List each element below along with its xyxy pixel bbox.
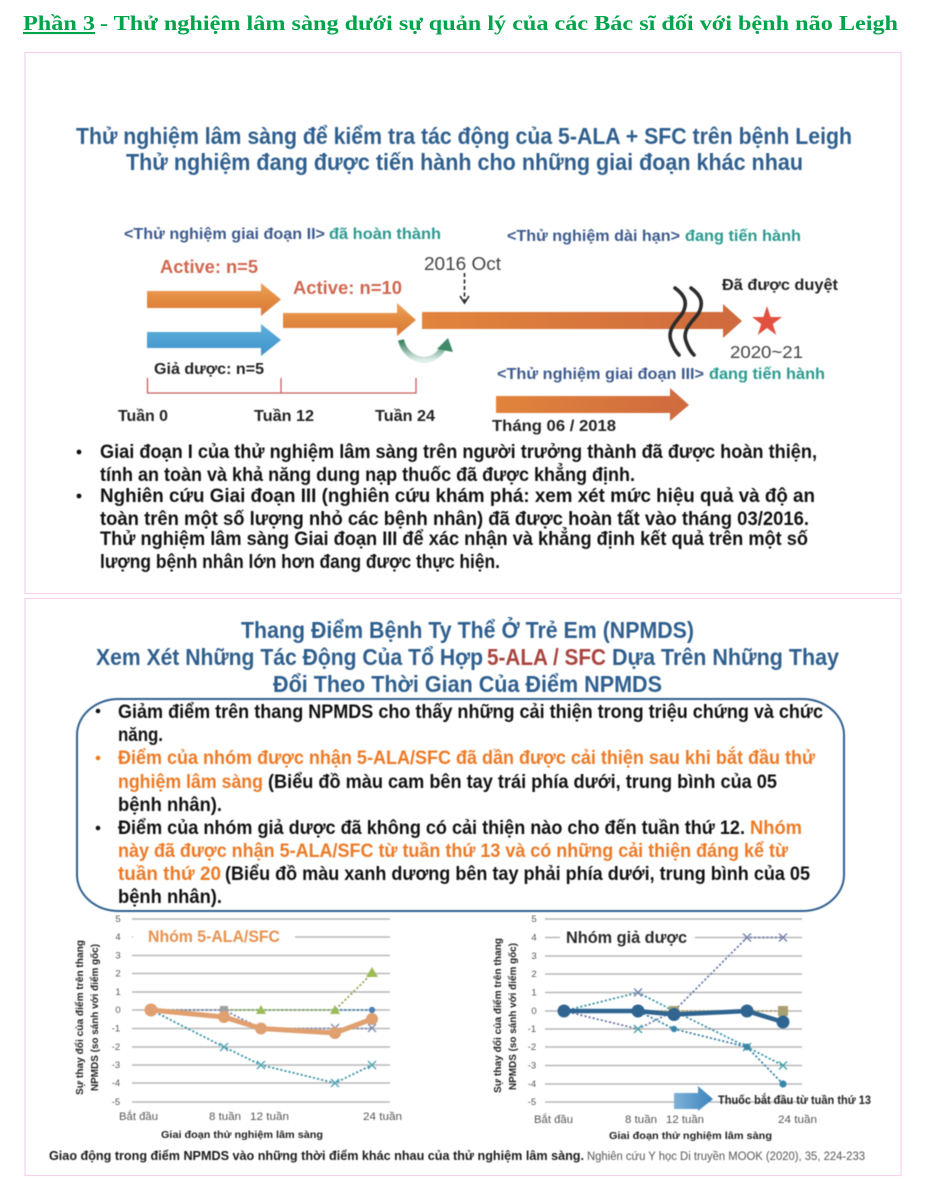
text block: trial notes: Thử nghiệm lâm sàng Giai đoạn III để xác nhận và khẳng định kết quả trên một số <box>100 528 808 550</box>
group labels: Active: n=10 <box>293 277 402 298</box>
arrow: long-term trial <box>422 304 742 338</box>
callout: key findings: này đã được nhận 5-ALA/SFC từ tuần thứ 13 và có những cải thiện đáng kể từ <box>118 841 788 862</box>
week labels: Tuần 12 <box>254 408 314 425</box>
callout: key findings <box>77 699 844 911</box>
arrow: active week 0-12 <box>147 283 281 316</box>
axis labels <box>74 940 402 1141</box>
heading: NPMDS <box>96 615 839 697</box>
callout: key findings: Nhóm <box>750 818 802 839</box>
icon: break waves <box>670 288 701 355</box>
phase III start date: Tháng 06 / 2018 <box>492 418 616 435</box>
arrow: crossover curve <box>401 338 453 360</box>
icon: approval star <box>752 306 782 335</box>
heading: NPMDS: Dựa Trên Những Thay <box>612 644 839 670</box>
timeline diagram <box>118 226 838 435</box>
heading: trial overview: Thử nghiệm đang được tiến hành cho những giai đoạn khác nhau <box>126 149 803 175</box>
heading: NPMDS: Đổi Theo Thời Gian Của Điểm NPMDS <box>273 671 662 697</box>
axis labels: Sự thay đổi của điểm trên thang <box>492 938 504 1093</box>
phase labels: đang tiến hành <box>685 228 801 245</box>
chart: 5-ALA/SFC group: 1 <box>115 987 121 998</box>
axis labels: NPMDS (so sánh với điểm gốc) <box>507 943 519 1090</box>
heading: NPMDS: Thang Điểm Bệnh Ty Thể Ở Trẻ Em (NPMDS) <box>241 615 694 643</box>
chart: 5-ALA/SFC group: 3 <box>115 950 121 962</box>
caption and source: Nghiên cứu Y học Di truyền MOOK (2020), 35, 224-233 <box>587 1151 865 1163</box>
arrow: active week 12-24 <box>283 303 416 336</box>
callout: key findings: (Biểu đồ màu cam bên tay trái phía dưới, trung bình của 05 <box>268 772 777 793</box>
chart: placebo group: -1 <box>528 1024 536 1035</box>
chart: placebo group <box>492 914 871 1142</box>
callout: key findings: Điểm của nhóm giả dược đã không có cải thiện nào cho đến tuần thứ 12. <box>118 818 745 839</box>
chart: placebo group: 4 <box>531 932 537 944</box>
arrow: 2016 Oct marker: 2016 Oct <box>424 254 501 274</box>
chart: 5-ALA/SFC group: 0 <box>115 1005 121 1016</box>
phase labels <box>124 226 825 383</box>
callout: key findings: Giảm điểm trên thang NPMDS cho thấy những cải thiện trong triệu chứng và chức <box>118 702 823 723</box>
chart: 5-ALA/SFC group: -5 <box>112 1097 120 1108</box>
heading: NPMDS: Xem Xét Những Tác Động Của Tổ Hợp <box>96 644 483 670</box>
chart: placebo group: -2 <box>528 1042 536 1053</box>
chart: 5-ALA/SFC group: -1 <box>112 1024 120 1034</box>
phase labels: <Thử nghiệm giai đoạn II> <box>124 226 325 243</box>
callout: key findings: bệnh nhân). <box>118 795 222 816</box>
axis labels <box>492 938 817 1142</box>
chart title: Nhóm giả dược <box>566 929 687 947</box>
phase labels: đã hoàn thành <box>329 226 441 243</box>
phase labels: <Thử nghiệm dài hạn> <box>507 228 680 245</box>
week labels: Tuần 24 <box>375 408 435 425</box>
chart: 5-ALA/SFC group: -2 <box>112 1042 120 1053</box>
chart: 5-ALA/SFC group: 5 <box>115 914 121 925</box>
group labels <box>154 256 402 378</box>
text block: trial notes: lượng bệnh nhân lớn hơn đang được thực hiện. <box>100 552 500 573</box>
drug start note: Thuốc bắt đầu từ tuần thứ 13 <box>718 1094 871 1107</box>
chart: placebo group: 0 <box>531 1006 537 1017</box>
phase labels: đang tiến hành <box>709 366 825 383</box>
week bracket <box>148 378 416 393</box>
callout: key findings: Điểm của nhóm được nhận 5-ALA/SFC đã dần được cải thiện sau khi bắt đầu thử <box>118 747 815 769</box>
chart: placebo group: -4 <box>528 1079 536 1090</box>
text block: trial notes <box>77 442 817 573</box>
arrow: drug start <box>674 1086 713 1111</box>
chart: 5-ALA/SFC group: 2 <box>115 968 121 980</box>
axis labels: Giai đoạn thử nghiệm lâm sàng <box>161 1129 323 1141</box>
week labels <box>118 408 435 425</box>
title: - Thử nghiệm lâm sàng dưới sự quản lý của các Bác sĩ đối với bệnh não Leigh <box>100 11 898 35</box>
approval labels <box>722 277 838 362</box>
text block: trial notes: tính an toàn và khả năng dung nạp thuốc đã được khẳng định. <box>100 464 635 486</box>
axis labels: Bắt đầu <box>119 1110 158 1123</box>
mean line: 5-ALA/SFC <box>144 1004 378 1039</box>
axis labels: Sự thay đổi của điểm trên thang <box>74 940 86 1095</box>
axis labels: 12 tuần <box>666 1114 704 1126</box>
axis labels: 24 tuần <box>778 1114 817 1126</box>
chart: placebo group: -3 <box>528 1060 536 1072</box>
panel: clinical trial timeline <box>25 52 901 594</box>
axis labels: NPMDS (so sánh với điểm gốc) <box>89 944 101 1091</box>
callout: key findings: bệnh nhân). <box>118 887 222 908</box>
chart: 5-ALA/SFC group <box>74 914 402 1141</box>
panel: NPMDS results <box>25 598 901 1176</box>
text block: trial notes: Nghiên cứu Giai đoạn III (nghiên cứu khám phá: xem xét mức hiệu quả và độ an <box>100 486 815 507</box>
axis labels: Bắt đầu <box>534 1113 573 1126</box>
chart: placebo group: 5 <box>531 914 537 925</box>
title: Phần 3 <box>23 11 95 35</box>
callout: key findings: (Biểu đồ màu xanh dương bên tay phải phía dưới, trung bình của 05 <box>225 864 810 885</box>
text block: trial notes: toàn trên một số lượng nhỏ các bệnh nhân) đã được hoàn tất vào tháng 03/2016. <box>100 509 809 530</box>
caption and source <box>49 1149 865 1163</box>
axis labels: 8 tuần <box>209 1111 241 1123</box>
mean line: placebo <box>558 1004 790 1028</box>
arrow: 2016 Oct marker <box>424 254 501 303</box>
approval labels: Đã được duyệt <box>722 277 838 294</box>
arrow: phase III trial <box>496 388 689 421</box>
arrow: placebo week 0-12 <box>147 324 281 356</box>
axis labels: 8 tuần <box>625 1114 657 1126</box>
axis labels: Giai đoạn thử nghiệm lâm sàng <box>609 1130 772 1142</box>
callout: key findings: năng. <box>118 725 163 746</box>
phase labels: <Thử nghiệm giai đoạn III> <box>497 366 704 383</box>
chart: 5-ALA/SFC group: 4 <box>115 932 121 943</box>
text block: trial notes: Giai đoạn I của thử nghiệm lâm sàng trên người trưởng thành đã được hoàn thiện, <box>100 442 817 463</box>
chart: 5-ALA/SFC group: -3 <box>112 1060 120 1071</box>
chart: 5-ALA/SFC group: -4 <box>112 1078 120 1089</box>
chart: placebo group: 1 <box>531 988 537 998</box>
series lines <box>151 967 378 1087</box>
callout: key findings: tuần thứ 20 <box>118 864 221 885</box>
heading: trial overview <box>76 123 852 175</box>
axis labels: 12 tuần <box>250 1111 289 1123</box>
axis labels: 24 tuần <box>363 1111 402 1123</box>
week labels: Tuần 0 <box>118 408 168 425</box>
heading: trial overview: Thử nghiệm lâm sàng để kiểm tra tác động của 5-ALA + SFC trên bệnh Leigh <box>76 123 852 149</box>
group labels: Active: n=5 <box>160 256 258 277</box>
approval labels: 2020~21 <box>730 342 803 362</box>
chart: placebo group: 3 <box>531 951 537 962</box>
heading: NPMDS: 5-ALA / SFC <box>487 644 606 670</box>
callout: key findings: nghiệm lâm sàng <box>118 772 263 793</box>
chart title: Nhóm 5-ALA/SFC <box>148 928 280 946</box>
chart: placebo group: -5 <box>528 1097 536 1108</box>
group labels: Giả dược: n=5 <box>154 361 264 378</box>
caption and source: Giao động trong điểm NPMDS vào những thời điểm khác nhau của thử nghiệm lâm sàng. <box>49 1149 584 1163</box>
series lines <box>564 934 788 1088</box>
chart: placebo group: 2 <box>531 969 537 980</box>
